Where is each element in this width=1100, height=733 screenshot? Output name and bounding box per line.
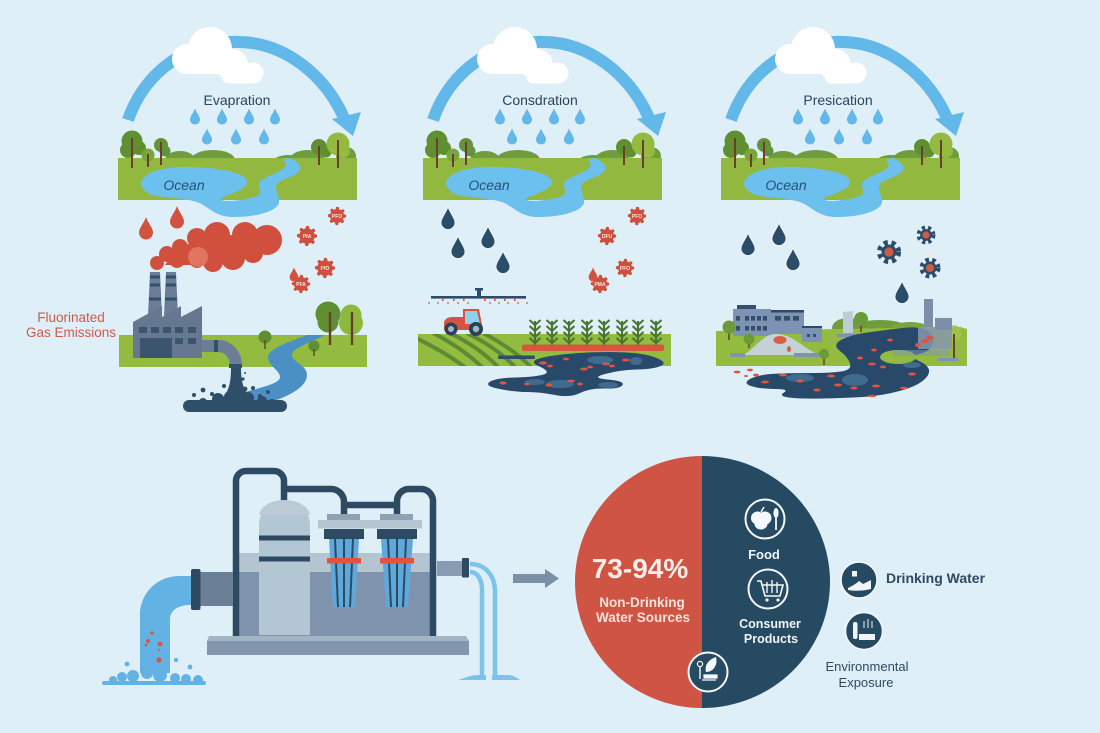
icon: consumer products cart (748, 570, 788, 608)
ground strip (119, 335, 367, 367)
heading: Consdration: Consdration (502, 92, 578, 108)
panel: evaporation water cycle (118, 27, 361, 217)
heading: Presication: Presication (803, 92, 873, 108)
buildings (733, 305, 822, 342)
sprayer boom (428, 288, 528, 304)
filter cartridge one (324, 529, 364, 607)
inlet column (259, 500, 310, 635)
panel: precipitation water cycle (721, 27, 964, 217)
label: Ocean: Ocean (163, 177, 205, 193)
discharge and sludge (183, 368, 287, 412)
pie slice: other sources (702, 456, 830, 708)
base platform (207, 636, 469, 655)
label: Fluorinated Gas Emissions: Fluorinated (37, 310, 105, 325)
icon: PFAS particles: PFO (632, 214, 642, 220)
label: Fluorinated Gas Emissions (26, 310, 116, 340)
treatment pipes (236, 471, 433, 636)
label: Non-Drinking Water Sources: Non-Drinking (599, 595, 685, 610)
label: Drinking Water: Drinking Water (886, 570, 986, 586)
label: Fluorinated Gas Emissions: Gas Emissions (26, 325, 116, 340)
icon: PFAS particles: PfA (303, 234, 312, 240)
icon: PFAS particles: PFO (332, 214, 342, 220)
icon: drinking water (841, 562, 877, 598)
stat: 73-94%: 73-94% (592, 553, 688, 584)
icon: dark drops (441, 207, 510, 274)
panel: factory emissions (26, 206, 367, 412)
factory (133, 272, 202, 358)
label: Consumer Products: Consumer (739, 617, 801, 631)
label: Non-Drinking Water Sources: Water Sources (596, 610, 690, 625)
filter cartridge two (377, 529, 417, 607)
icon: environmental leaf (688, 652, 728, 692)
label: Food: Food (748, 547, 780, 562)
right industrial plant (893, 299, 958, 361)
arrow (513, 569, 559, 588)
contaminated river and pool (734, 327, 933, 399)
label: Ocean: Ocean (468, 177, 510, 193)
icon: red drops (139, 206, 184, 240)
icon: food (746, 500, 784, 538)
contaminated soil band (522, 344, 664, 351)
red emission cloud (150, 222, 282, 272)
chart: exposure source pie (575, 456, 830, 708)
polluted river (226, 335, 325, 403)
icon: PFAS particles (290, 208, 345, 292)
label: Consumer Products (739, 617, 801, 646)
field (416, 333, 671, 368)
icon: PFAS particles: PMA (594, 282, 606, 288)
panel: condensation water cycle (423, 27, 666, 217)
icon: PFAS particles: DFU (602, 234, 613, 240)
label: Ocean: Ocean (765, 177, 807, 193)
trees (722, 312, 962, 365)
panel: water treatment plant (102, 471, 559, 685)
waste mound (730, 334, 819, 357)
splash (102, 658, 206, 685)
ground and hills (716, 318, 967, 366)
outflow pipe (202, 340, 242, 368)
panel: urban and industrial runoff (716, 223, 967, 399)
filter plate (318, 514, 422, 528)
trees (258, 302, 363, 356)
icon: PFAS particles (589, 208, 645, 292)
contaminant particles in inflow (145, 631, 162, 663)
label: Environmental Exposure: Environmental (825, 659, 909, 674)
icon: PFAS particles: PfO (321, 266, 330, 272)
icon: PFAS particles: PFA (296, 282, 306, 288)
label: Non-Drinking Water Sources (596, 595, 690, 625)
pie slice: non-drinking water sources (575, 456, 702, 708)
crops (530, 320, 662, 346)
icon: environmental exposure (846, 612, 882, 650)
panel: agricultural runoff (416, 207, 671, 396)
icon: tractor (444, 309, 483, 336)
label: Consumer Products: Products (744, 632, 798, 646)
icon: PFAS particles: PFO (620, 266, 630, 272)
outlet pipe and clean water (437, 558, 520, 680)
heading: Evapration: Evapration (204, 92, 270, 108)
icon: contaminant particles (880, 228, 938, 276)
tank (235, 553, 433, 636)
icon: dark drops (741, 223, 909, 304)
contaminated pool (488, 352, 664, 396)
label: Environmental Exposure (825, 659, 909, 690)
tower (837, 311, 859, 337)
inlet pipe (140, 569, 233, 673)
label: Environmental Exposure: Exposure (839, 675, 893, 690)
